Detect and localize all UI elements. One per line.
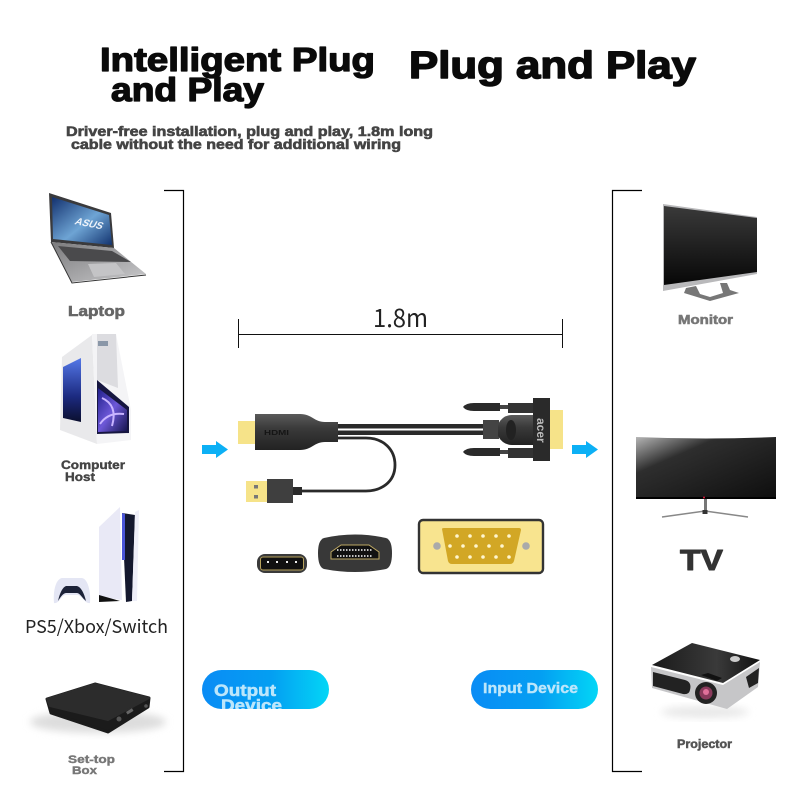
USB plug: [246, 479, 302, 503]
label: Computer Host: [61, 458, 125, 484]
icon: curved TV: [636, 437, 776, 517]
button: Input Device: [471, 670, 598, 709]
description text: cable without the need for additional wiring: [71, 136, 401, 152]
label: Monitor: Monitor: [678, 312, 733, 327]
icon: computer tower: [60, 334, 131, 444]
dimension line: 1.8m: 1.8m: [373, 299, 428, 335]
VGA plug: [463, 398, 563, 461]
USB branch cable: [300, 438, 395, 491]
button: Output Device: Output: [214, 682, 277, 700]
arrow: output: [572, 441, 598, 458]
port: HDMI: [318, 534, 392, 572]
description text: Driver-free installation, plug and play, 1.8m long: [66, 123, 433, 139]
icon: laptop: [49, 193, 146, 283]
heading: Plug and Play: Plug and Play: [409, 45, 696, 87]
icon: game console and controller: [54, 507, 139, 603]
VGA plug: acer: [534, 418, 548, 443]
icon: set-top box: [30, 684, 166, 733]
icon: monitor: [663, 204, 757, 301]
label: Set-top Box: Set-top: [68, 754, 115, 766]
label: TV: TV: [680, 545, 724, 577]
button: Output Device: Device: [221, 697, 282, 715]
port: USB: [257, 554, 307, 573]
title: Intelligent Plug and Play: [100, 41, 375, 108]
label: Projector: Projector: [677, 739, 733, 751]
icon: projector: [651, 643, 760, 718]
right bracket: [612, 190, 642, 772]
label: Set-top Box: Box: [72, 765, 98, 777]
left bracket: [164, 190, 184, 772]
icon: laptop: ASUS: [73, 217, 105, 232]
title: Intelligent Plug and Play: Intelligent Plug: [100, 41, 375, 78]
label: Computer Host: Computer: [61, 458, 125, 472]
label: PS5/Xbox/Switch: PS5/Xbox/Switch: [25, 613, 168, 639]
HDMI plug: HDMI: [264, 430, 289, 437]
port: VGA: [419, 520, 543, 573]
description text: [66, 123, 433, 152]
twin main cables: [336, 424, 486, 435]
button: Input Device: Input Device: [483, 681, 578, 697]
label: Computer Host: Host: [65, 470, 95, 484]
title: Intelligent Plug and Play: and Play: [111, 71, 265, 108]
arrow: input: [202, 441, 228, 458]
dimension line: 1.8m: [238, 299, 563, 348]
HDMI plug: [238, 414, 338, 450]
label: Set-top Box: [68, 754, 115, 777]
button: Output Device: [202, 670, 329, 709]
cable assembly: [238, 398, 563, 503]
label: Laptop: Laptop: [68, 303, 125, 320]
